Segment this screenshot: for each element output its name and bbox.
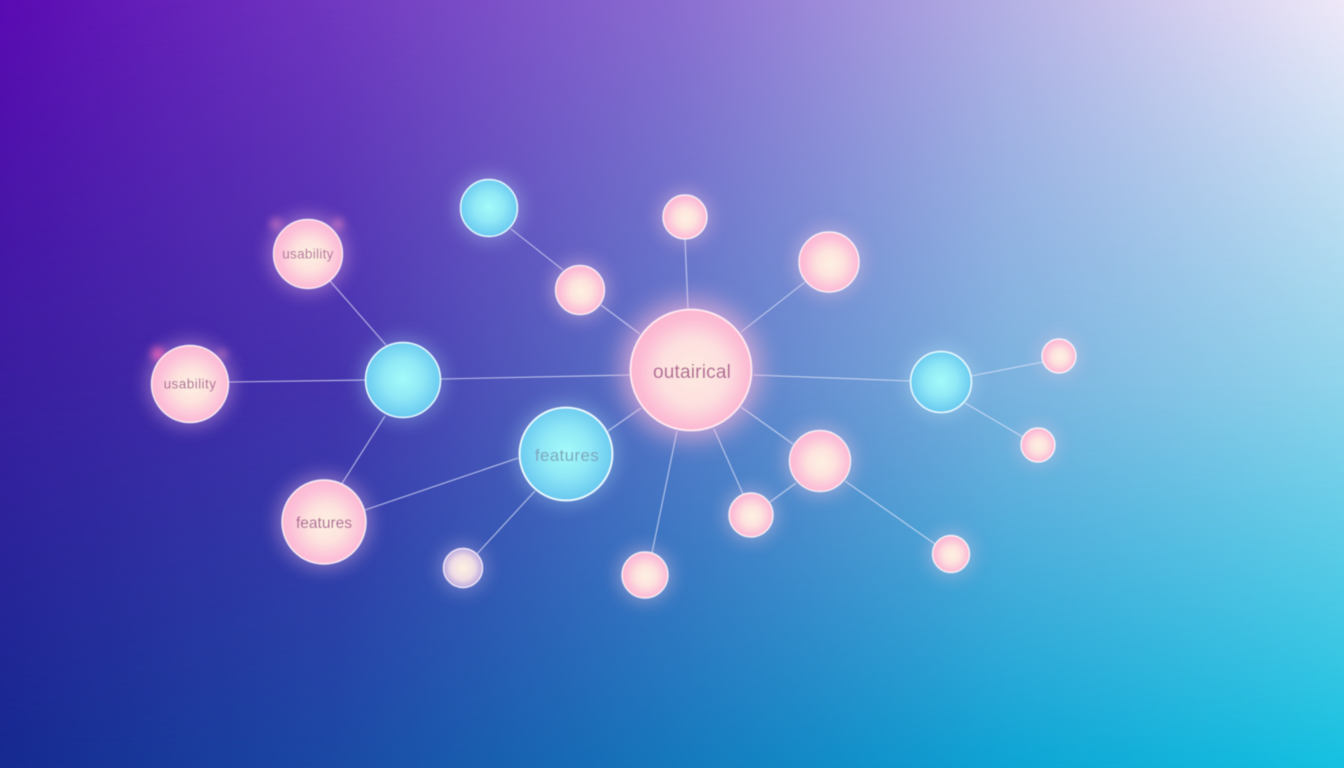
node: lower middle pink (725, 489, 777, 541)
node: pale lower left (439, 544, 487, 592)
node: features pink: features (296, 515, 352, 532)
node: far right upper pink (1039, 336, 1079, 376)
node: top cyan (456, 175, 522, 241)
node: features cyan: features (535, 446, 599, 465)
node: upper middle pink (551, 261, 609, 319)
node: features pink (277, 475, 371, 569)
node: usability left (147, 341, 233, 427)
node: top pink small (659, 191, 711, 243)
node: far lower right pink (928, 531, 974, 577)
node: far right lower pink (1018, 425, 1058, 465)
network diagram (147, 175, 1079, 602)
node: bottom pink (618, 548, 672, 602)
node: right cyan hub (906, 347, 976, 417)
node: usability left: usability (164, 376, 216, 392)
node: usability upper: usability (282, 246, 334, 262)
node: features cyan (515, 403, 617, 505)
node: left cyan hub (361, 338, 445, 422)
node: lower right pink (785, 426, 855, 496)
node: upper right pink (795, 228, 863, 296)
node: usability upper (269, 215, 347, 293)
node: central hub (622, 301, 760, 439)
connector lines (229, 229, 1043, 555)
node: central hub: outairical (653, 362, 731, 383)
